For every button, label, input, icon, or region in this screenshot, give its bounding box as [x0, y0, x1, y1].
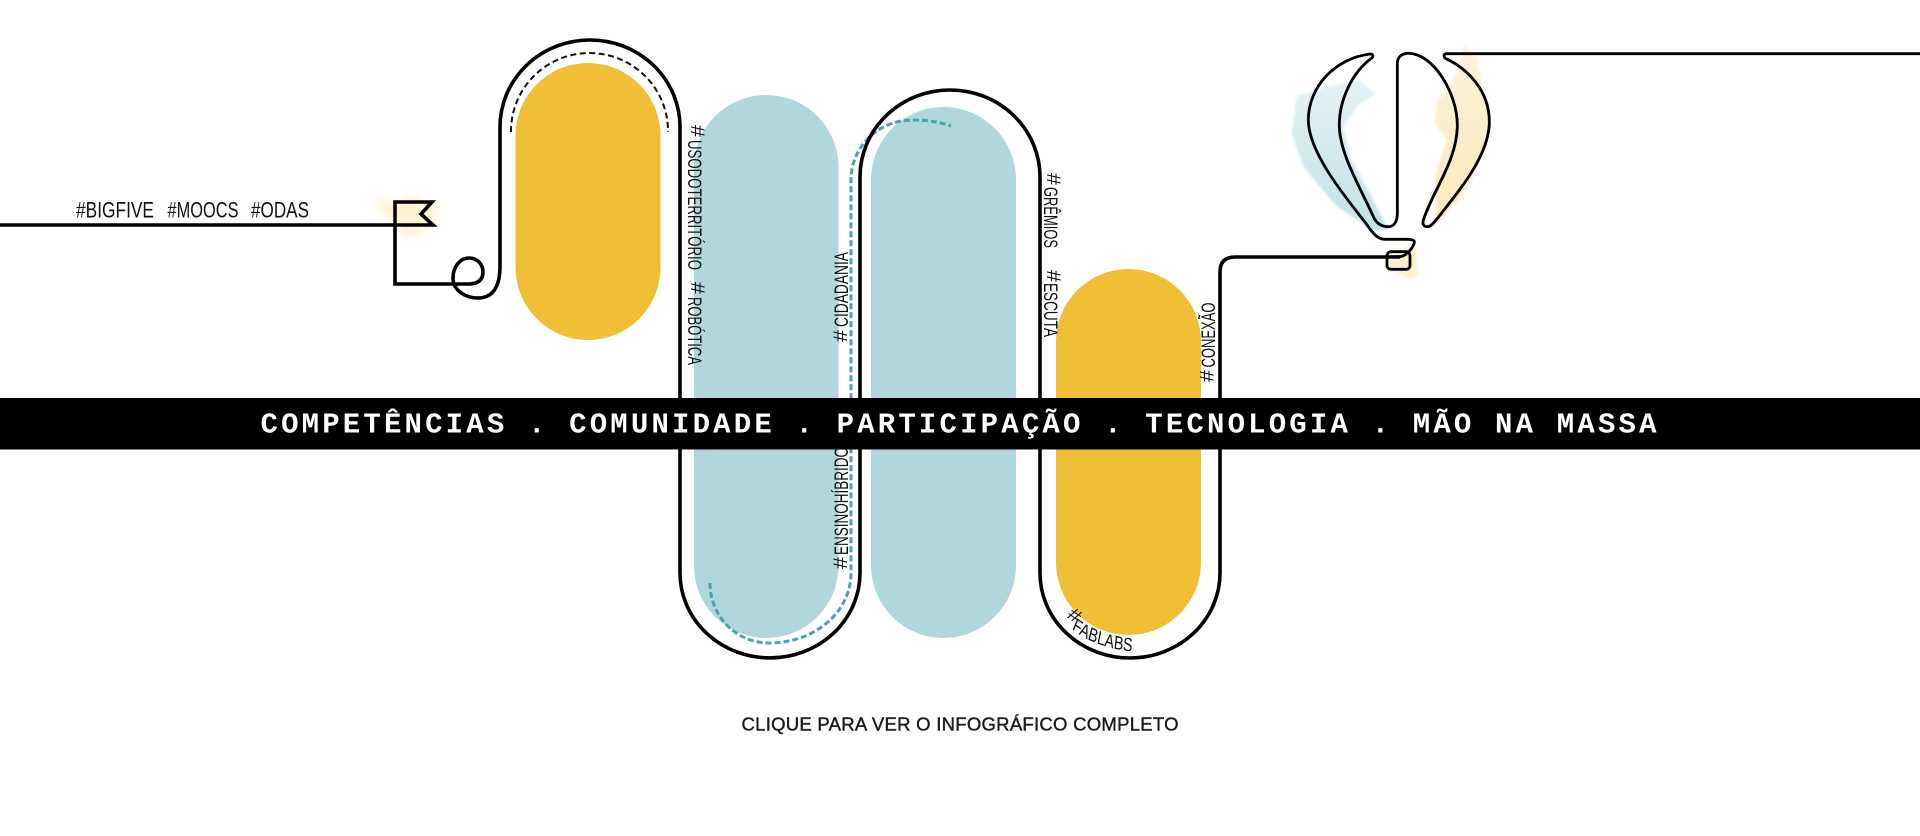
tag: ensino híbrido: ENSINOHÍBRIDO: [832, 447, 853, 555]
dashed inner line around yellow pill: [511, 53, 668, 132]
tag: escuta: #: [1042, 270, 1063, 282]
icon: hot air balloon: [1308, 53, 1920, 269]
tag: ensino híbrido: [831, 447, 853, 569]
yellow pill 1: [516, 63, 660, 340]
tag: fablabs: [1063, 604, 1132, 652]
blue pill 2: [871, 107, 1016, 638]
tag: grêmios: [1039, 173, 1063, 248]
tag: conexão: #: [1198, 370, 1218, 382]
black band with keywords: [0, 398, 1920, 450]
black band with keywords: COMPETÊNCIAS . COMUNIDADE . PARTICIPAÇÃO . TECNOLOGIA . MÃO NA MASSA: [260, 408, 1657, 442]
tag: uso do território: [683, 125, 707, 270]
tag: robótica: [683, 282, 707, 365]
tag: fablabs: FABLABS: [1072, 618, 1132, 652]
tag: cidadania: #: [831, 330, 852, 342]
tag: cidadania: CIDADANIA: [832, 252, 853, 327]
main black route with flag and loop: [0, 40, 1400, 658]
tag: cidadania: [831, 252, 853, 342]
tags on horizontal line: #MOOCS: [168, 198, 238, 222]
tag: grêmios: #: [1042, 173, 1063, 185]
tag: conexão: [1198, 302, 1220, 382]
yellow pill 2: [1056, 269, 1201, 635]
tag: fablabs: #: [1063, 604, 1085, 628]
tag: ensino híbrido: #: [831, 557, 852, 569]
tags on horizontal line: #ODAS: [251, 198, 309, 222]
tag: uso do território: USODOTERRITÓRIO: [683, 140, 705, 270]
tag: robótica: #: [686, 282, 707, 294]
tags on horizontal line: [76, 198, 309, 222]
watercolor washes: balloon: [1292, 45, 1490, 278]
watercolor wash: flag: [372, 195, 438, 238]
teal dashed route: [710, 120, 951, 643]
blue pill 1: [694, 95, 838, 638]
tags on horizontal line: #BIGFIVE: [76, 198, 154, 222]
tag: robótica: ROBÓTICA: [683, 297, 705, 365]
tag: conexão: CONEXÃO: [1198, 302, 1220, 368]
tag: escuta: [1039, 270, 1063, 337]
tag: escuta: ESCUTA: [1039, 283, 1060, 337]
tag: grêmios: GRÊMIOS: [1039, 187, 1061, 248]
tag: uso do território: #: [686, 125, 707, 137]
call to action text: CLIQUE PARA VER O INFOGRÁFICO COMPLETO: [742, 714, 1178, 734]
